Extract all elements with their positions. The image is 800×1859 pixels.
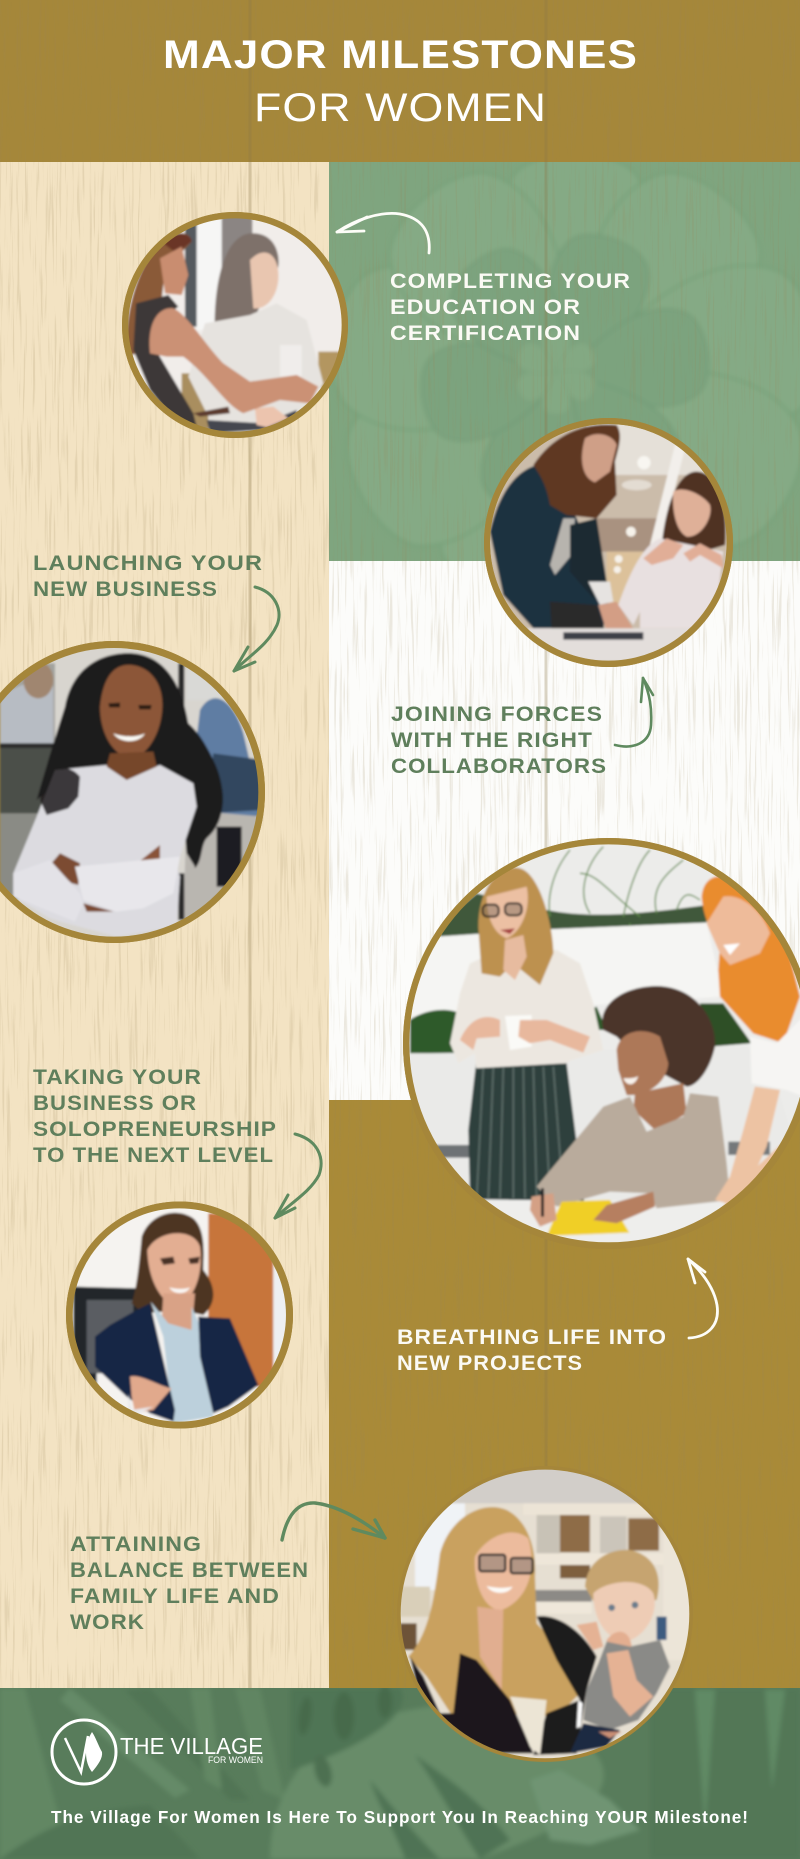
text: completing your education: COMPLETING YOUR (390, 269, 631, 293)
arrow: taking (275, 1134, 321, 1218)
text: taking your business: TAKING YOUR (33, 1065, 202, 1089)
text: launching your new business: LAUNCHING YOUR (33, 551, 263, 575)
title (163, 33, 638, 130)
logo badge (52, 1720, 116, 1784)
text: joining forces: WITH THE RIGHT (391, 728, 593, 752)
text: taking your business: SOLOPRENEURSHIP (33, 1117, 277, 1141)
text: joining forces: COLLABORATORS (391, 754, 607, 778)
panel: header band (0, 0, 800, 162)
text: breathing life (397, 1325, 667, 1375)
text: launching your new business (33, 551, 263, 601)
text: attaining balance: ATTAINING (70, 1532, 202, 1556)
panel: background green succulent (329, 162, 800, 561)
text: taking your business: TO THE NEXT LEVEL (33, 1143, 274, 1167)
panel: background gold wood lower (329, 1100, 800, 1688)
arrow: education (337, 213, 429, 253)
arrow: breathing (688, 1259, 717, 1338)
text: launching your new business: NEW BUSINESS (33, 577, 218, 601)
photo circle: new business (0, 620, 267, 953)
panel: background white wood (329, 561, 800, 1100)
text: attaining balance (70, 1532, 309, 1634)
panel: background cream wood (0, 162, 329, 1688)
photo circle: education (122, 212, 348, 438)
photo circle: family (400, 1470, 690, 1762)
text: breathing life: NEW PROJECTS (397, 1351, 583, 1375)
title line 2: FOR WOMEN (254, 86, 547, 130)
arrow: joining (615, 678, 653, 746)
arrow: attaining (282, 1503, 385, 1540)
arrow: launching (234, 587, 279, 671)
text: completing your education: CERTIFICATION (390, 321, 581, 345)
photo circle: collaborators (484, 418, 733, 667)
text: joining forces (391, 702, 607, 778)
text: attaining balance: BALANCE BETWEEN (70, 1558, 309, 1582)
text: completing your education (390, 269, 631, 345)
logo: The Village For Women (52, 1720, 263, 1784)
text: breathing life: BREATHING LIFE INTO (397, 1325, 667, 1349)
logo sub-wordmark: FOR WOMEN (208, 1755, 263, 1765)
plank seams (250, 0, 546, 1688)
panel: footer band with leaves (0, 1686, 800, 1859)
text: joining forces: JOINING FORCES (391, 702, 603, 726)
footer tagline: The Village For Women Is Here To Support You In Reaching YOUR Milestone! (51, 1807, 749, 1827)
text: taking your business: BUSINESS OR (33, 1091, 197, 1115)
logo wordmark: THE VILLAGE (120, 1733, 263, 1759)
text: completing your education: EDUCATION OR (390, 295, 581, 319)
text: taking your business (33, 1065, 277, 1167)
text: attaining balance: FAMILY LIFE AND (70, 1584, 280, 1608)
title line 1: MAJOR MILESTONES (163, 33, 638, 77)
photo circle: new projects (390, 830, 800, 1263)
photo circle: next level (66, 1202, 293, 1428)
text: attaining balance: WORK (70, 1610, 145, 1634)
